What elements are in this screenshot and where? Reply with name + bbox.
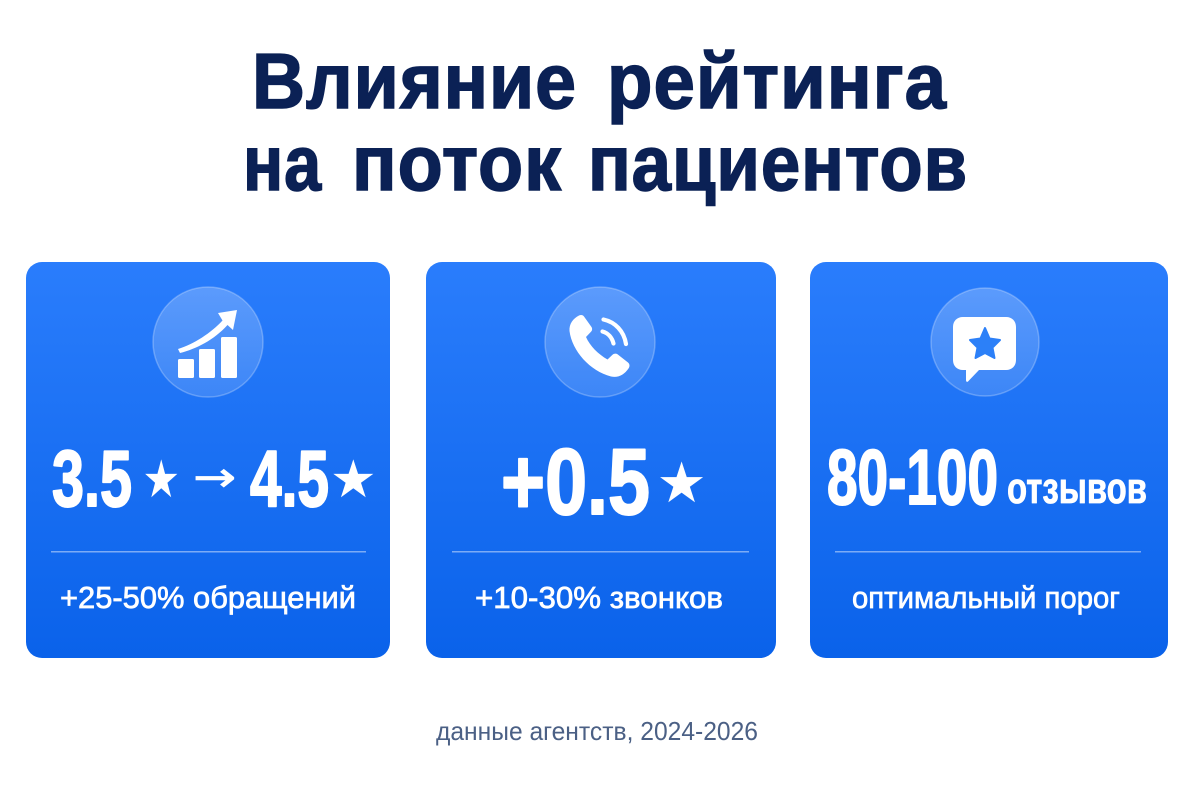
title: поток	[352, 119, 562, 207]
stat: 80-100 reviews: 80-100	[827, 433, 998, 521]
panel: rating growth	[26, 262, 390, 658]
stat: plus 0.5 star: +0.5	[501, 429, 650, 534]
title: на	[243, 119, 322, 207]
caption: +25-50% обращений	[60, 580, 356, 615]
stat: plus 0.5 star: ★	[656, 451, 707, 516]
caption: оптимальный порог	[852, 580, 1120, 615]
panel: calls	[426, 262, 776, 658]
icon: review bubble	[931, 288, 1039, 396]
stat: 3.5 to 4.5 stars	[52, 434, 377, 523]
title	[243, 37, 968, 207]
title: пациентов	[588, 119, 968, 207]
panel: reviews	[810, 262, 1168, 658]
icon: growth chart	[153, 287, 263, 397]
icon: phone	[545, 287, 655, 397]
source note: данные агентств, 2024-2026	[436, 716, 758, 746]
stat: 3.5 to 4.5 stars: ★	[142, 450, 180, 510]
caption: +10-30% звонков	[475, 580, 723, 615]
stat: 3.5 to 4.5 stars: 3.5	[52, 434, 132, 523]
title: Влияние	[252, 37, 577, 125]
stat: 3.5 to 4.5 stars: ★	[330, 450, 377, 510]
stat: 80-100 reviews: отзывов	[1007, 464, 1147, 513]
stat: 3.5 to 4.5 stars: 4.5	[250, 434, 329, 523]
title: рейтинга	[607, 37, 947, 125]
stat: 3.5 to 4.5 stars: →	[193, 453, 236, 501]
